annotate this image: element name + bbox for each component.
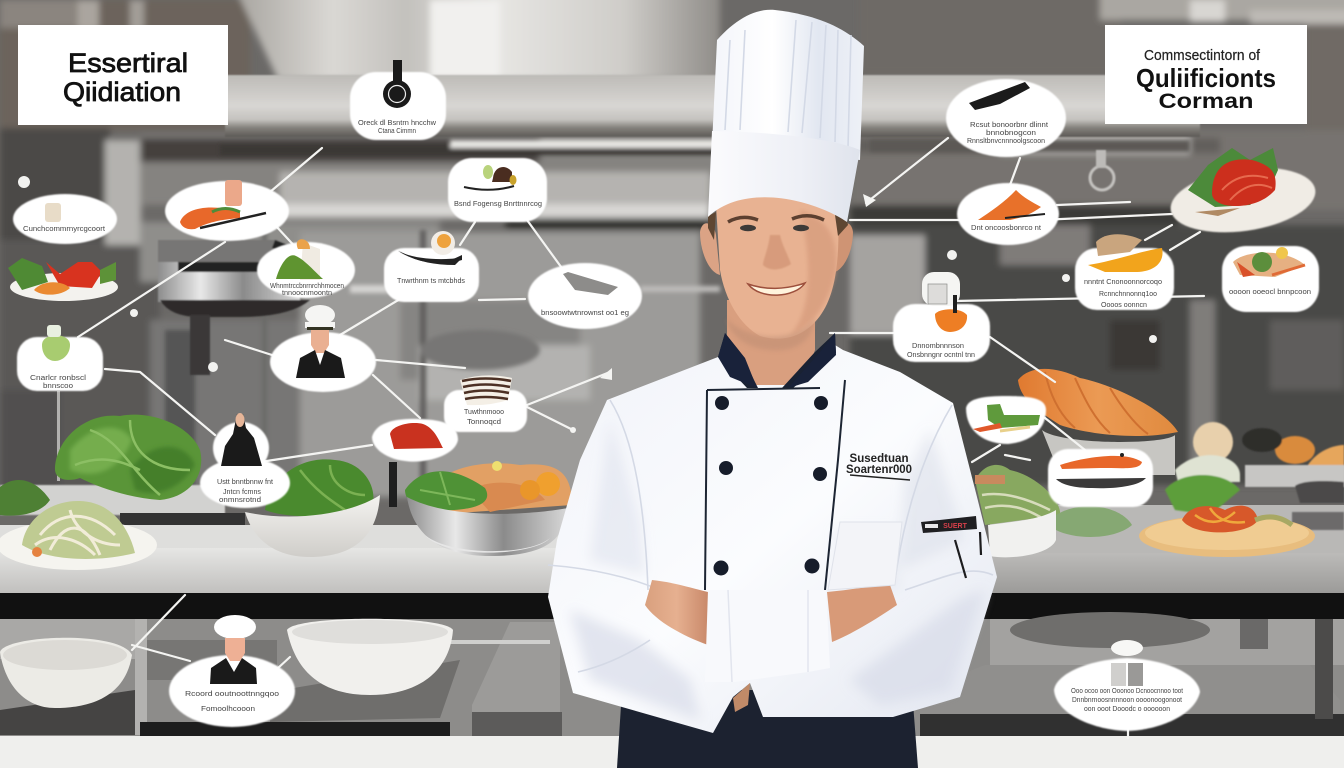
faucet xyxy=(1090,150,1114,190)
sleeve pen pocket xyxy=(955,532,981,578)
title panel: right: Quliificionts xyxy=(1136,63,1276,93)
dish: large plate with red food xyxy=(1166,148,1320,241)
bubble: black bar: Rnnsltbnvcnnnoolgscoon xyxy=(967,138,1045,145)
connector lines xyxy=(78,138,1204,738)
bubble: layered cake: Tuwthnmooo xyxy=(464,409,504,416)
title panel: left: Essertiral xyxy=(68,48,188,78)
bubble: pan with food xyxy=(384,231,479,302)
sleeve badge: SUERT xyxy=(943,523,968,530)
croissant xyxy=(1018,369,1178,475)
hat band xyxy=(708,131,860,222)
bubble: pan xyxy=(350,60,446,140)
bubble: chef silhouette: onmnsrotnd xyxy=(219,497,261,504)
white bowl with greens xyxy=(245,459,380,557)
hair xyxy=(708,212,848,240)
nose xyxy=(763,235,791,269)
bubble: dessert: Bsnd Fogensg Bnrttnnrcog xyxy=(454,201,542,208)
lower left bowl xyxy=(0,638,132,708)
ingredients: left lettuce xyxy=(0,415,201,516)
bubble: black bar xyxy=(946,79,1066,157)
title panel: right: Corman xyxy=(1158,90,1254,113)
bubble: chef silhouette: Ustt bnntbnnw fnt xyxy=(217,479,273,486)
bubble: yellow omelette: Rcnnchnnonnq1oo xyxy=(1099,291,1157,298)
bubble: small pastry xyxy=(13,194,117,244)
under-counter shelves xyxy=(0,612,1344,737)
collar xyxy=(718,333,836,388)
title panel: left xyxy=(18,25,228,125)
bubble: yellow omelette xyxy=(1075,234,1174,310)
sleeve creases xyxy=(548,400,993,672)
bubble: chef with toque xyxy=(169,615,295,727)
stock pot xyxy=(158,240,310,375)
title panel: right xyxy=(1105,25,1307,124)
bubble: black bar: bnnobnogcon xyxy=(986,130,1036,137)
bubble: layered cake: Tonnoqcd xyxy=(467,419,501,426)
bubble: chef silhouette xyxy=(200,413,290,508)
salad bowl right of chef xyxy=(975,465,1132,557)
front placket piping xyxy=(705,380,845,590)
lower middle bowl xyxy=(287,619,453,695)
icon: frying pan xyxy=(383,60,411,108)
cuff xyxy=(705,590,830,682)
side pole xyxy=(57,391,60,481)
bubble: carrot strips xyxy=(957,183,1059,245)
bubble: cucumber xyxy=(17,325,103,391)
hat pleats xyxy=(712,10,864,160)
pocket xyxy=(828,522,902,590)
jacket buttons xyxy=(714,396,828,576)
bubble: fish on dark plate xyxy=(1048,449,1153,507)
bubble: chef bust xyxy=(270,305,376,392)
eyebrows xyxy=(728,216,824,222)
bubble: cucumber: Cnarlcr ronbscl xyxy=(30,375,87,382)
bubble: pan: Ctana Cimmn xyxy=(378,128,416,135)
title panel: right: Commsectintorn of xyxy=(1144,48,1261,64)
bubble: spatula: bnsoowtwtnrownst oo1 eg xyxy=(541,310,629,317)
bubble: pan: Oreck dl Bsntrn hncchw xyxy=(358,120,437,127)
neck xyxy=(727,300,815,392)
bubble: chef with toque: Fomoolhcooon xyxy=(201,706,255,713)
face xyxy=(716,195,838,339)
bubble: black bar: Rcsut bonoorbnr dlinnt xyxy=(970,122,1048,129)
sleeve badge xyxy=(921,516,977,533)
small dots xyxy=(18,176,1157,372)
dish: salad plate top-left xyxy=(8,258,118,301)
bubble: orange jar xyxy=(893,272,990,362)
chef figure xyxy=(548,10,997,768)
bubble: grey box xyxy=(1054,640,1200,731)
bubble: orange jar: Dnnombnnnson xyxy=(912,343,964,350)
pizza and back dishes xyxy=(1139,422,1344,557)
trousers xyxy=(617,690,918,768)
chef jacket xyxy=(548,345,997,733)
bubble: pan with food: Tnwrthnm ts mtcbhds xyxy=(397,278,465,285)
metal bowl with food xyxy=(405,461,572,556)
bubble: red food plate xyxy=(372,419,458,507)
bubble: yellow omelette: nnntnt Cnonoonnorcoqo xyxy=(1084,279,1162,286)
bubble: yellow omelette: Oooos oonncn xyxy=(1101,302,1147,309)
back shelf xyxy=(0,485,245,533)
eyes xyxy=(740,225,809,231)
arrowheads xyxy=(570,194,876,433)
bubble: dessert xyxy=(448,158,547,222)
bubble: grey box: Dnnbnrnoosnnnnoon oooonoogonoot xyxy=(1072,697,1182,704)
mouth xyxy=(748,283,805,295)
bubble: spatula xyxy=(528,263,642,329)
counter xyxy=(0,505,1344,619)
bubble: grey box: oon ooot Dooodc o oooooon xyxy=(1084,706,1170,713)
crossed forearms xyxy=(645,580,708,645)
floor counter xyxy=(0,736,1344,768)
ears xyxy=(700,223,720,275)
bubble: salmon dish xyxy=(165,180,289,241)
bubble: layered cake xyxy=(444,375,527,432)
sleeve shading xyxy=(570,420,985,720)
bubble: small pastry: Cunchcommrnyrcgcoort xyxy=(23,226,105,233)
embroidered name xyxy=(846,453,912,480)
bubble: mixed plate xyxy=(1222,246,1319,312)
embroidered name: Susedtuan xyxy=(850,453,908,465)
bubble: cucumber: bnnscoo xyxy=(43,383,73,390)
embroidered name: Soartenr000 xyxy=(846,464,912,476)
bubble: broccoli: Whnmtrccbnrnrchhmocen xyxy=(270,283,344,290)
title panel: left: Qiidiation xyxy=(63,77,181,107)
bubble: salad plate xyxy=(966,396,1046,444)
bubble: broccoli xyxy=(257,239,355,298)
bubble: chef silhouette: Jntcn fcmns xyxy=(223,489,261,496)
plate with noodle salad xyxy=(0,501,157,570)
bubble: carrot strips: Dnt oncoosbonrco nt xyxy=(971,225,1041,232)
bubble: orange jar: Onsbnngnr ocntnl tnn xyxy=(907,352,975,359)
bubble: grey box: Ooo ocoo oon Ooonoo Dcnoocnnoo toot xyxy=(1071,688,1183,695)
bubble: chef with toque: Rcoord ooutnoottnngqoo xyxy=(185,691,279,698)
bubble: broccoli: tnnoocnmoontn xyxy=(282,290,332,297)
bubble: mixed plate: oooon ooeocl bnnpcoon xyxy=(1229,289,1311,296)
hood front lip xyxy=(225,75,1200,137)
